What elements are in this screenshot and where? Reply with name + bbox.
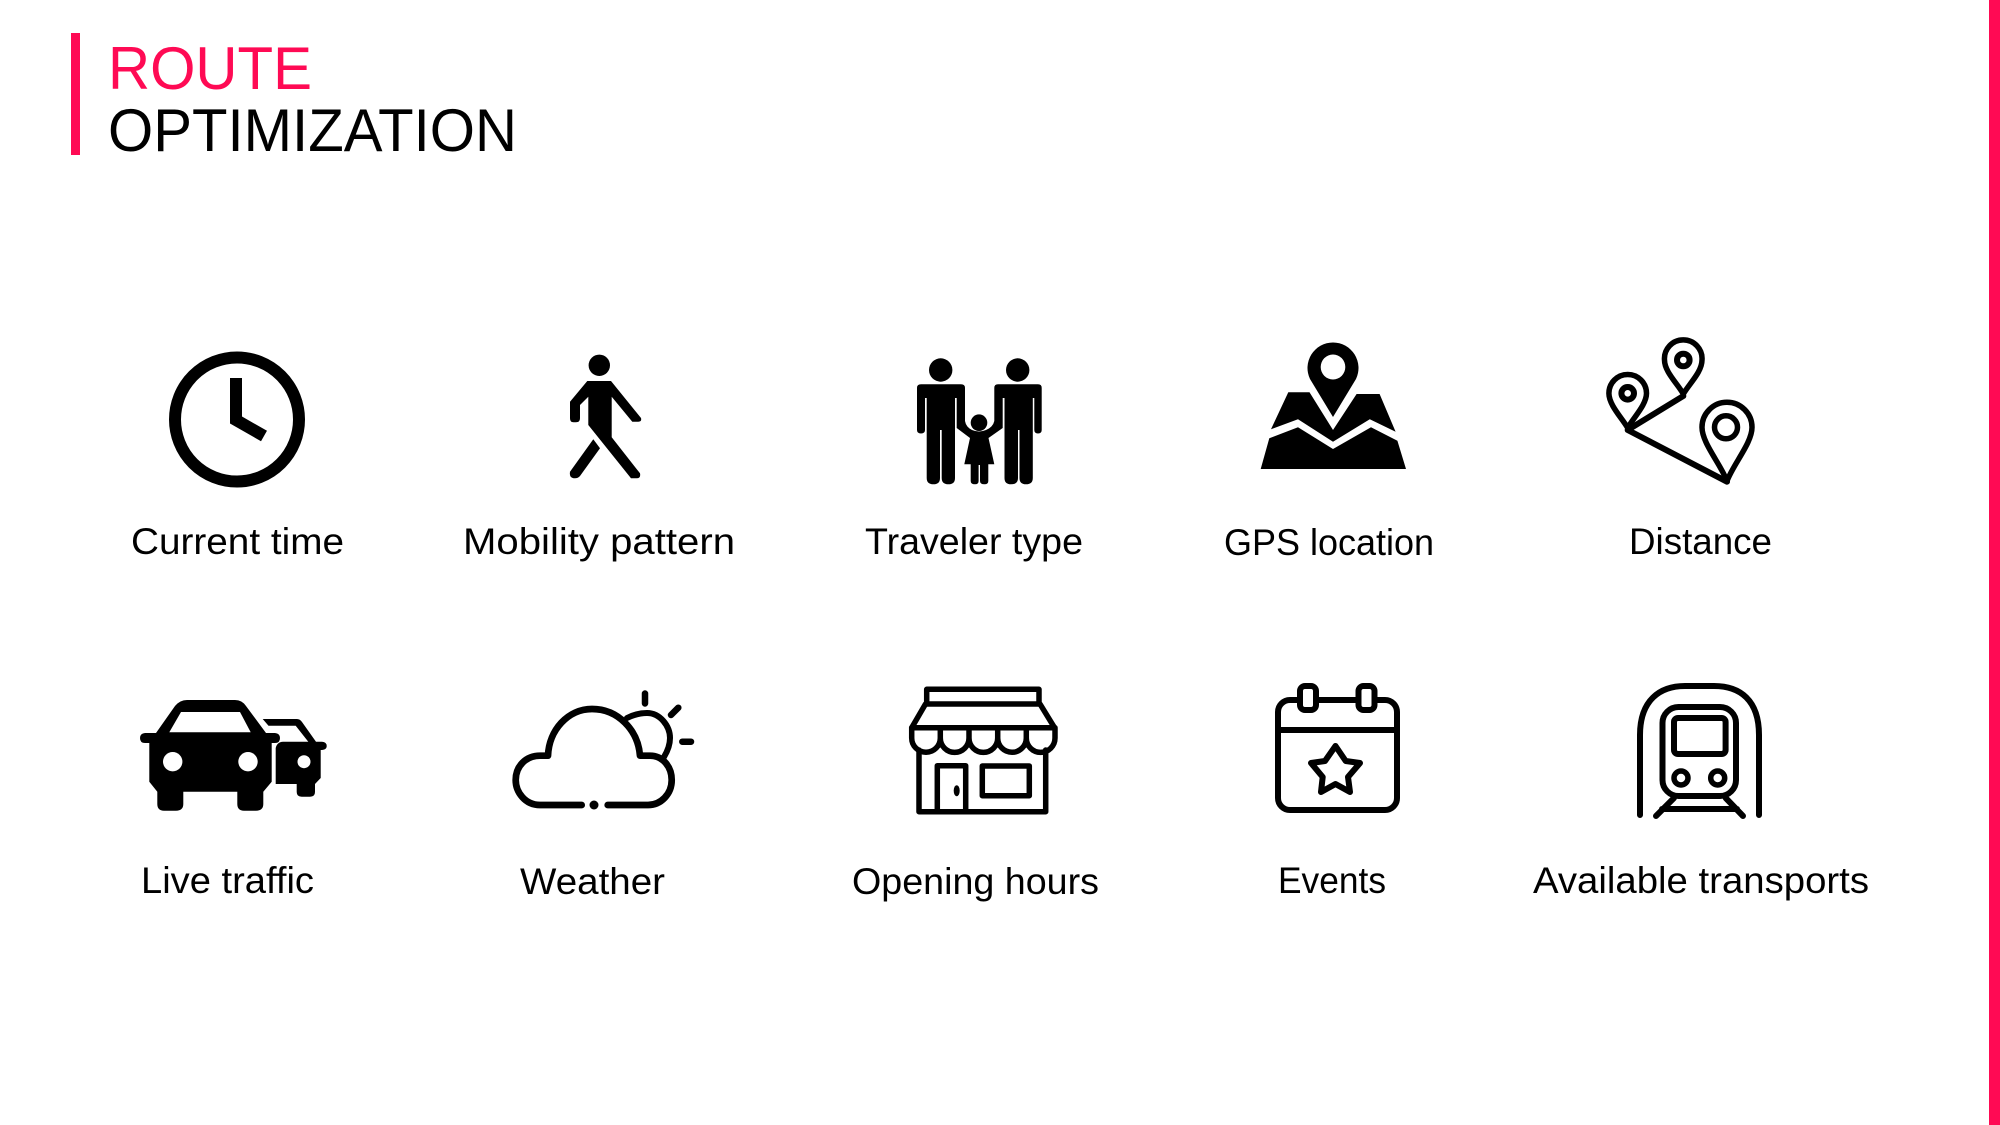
label: mobility pattern: Mobility pattern: [463, 521, 735, 562]
title line: optimization: OPTIMIZATION: [108, 97, 517, 164]
label: distance: Distance: [1629, 521, 1772, 562]
label: weather: Weather: [520, 861, 665, 902]
item: gps location: [1224, 342, 1434, 563]
title line: route: ROUTE: [108, 35, 312, 102]
label: available transports: Available transports: [1533, 860, 1869, 901]
item: opening hours: [852, 689, 1099, 902]
item: events: [1278, 686, 1397, 901]
label: traveler type: Traveler type: [865, 521, 1083, 562]
icon: cloud and sun: [516, 694, 691, 810]
item: mobility pattern: [463, 355, 735, 562]
icon: walking person: [570, 355, 641, 478]
label: live traffic: Live traffic: [141, 860, 314, 901]
item: traveler type: [865, 358, 1083, 562]
icon: map with pin: [1261, 342, 1406, 469]
icon: calendar with star: [1278, 686, 1397, 810]
label: current time: Current time: [131, 521, 344, 562]
item: weather: [516, 694, 691, 902]
item: live traffic: [140, 700, 327, 901]
item: current time: [131, 358, 344, 562]
label: gps location: GPS location: [1224, 522, 1434, 563]
item: distance: [1609, 340, 1772, 562]
title accent bar: [71, 33, 80, 155]
label: opening hours: Opening hours: [852, 861, 1099, 902]
item: available transports: [1533, 686, 1869, 901]
icon: train in tunnel: [1640, 686, 1759, 816]
label: events: Events: [1278, 860, 1386, 901]
title block: [71, 33, 517, 164]
icon: cars: [140, 700, 327, 811]
right edge accent bar: [1989, 0, 2000, 1125]
icon: clock: [175, 358, 299, 482]
icon: storefront: [912, 689, 1055, 812]
icon: route pins: [1609, 340, 1752, 482]
icon: family: [917, 358, 1042, 484]
